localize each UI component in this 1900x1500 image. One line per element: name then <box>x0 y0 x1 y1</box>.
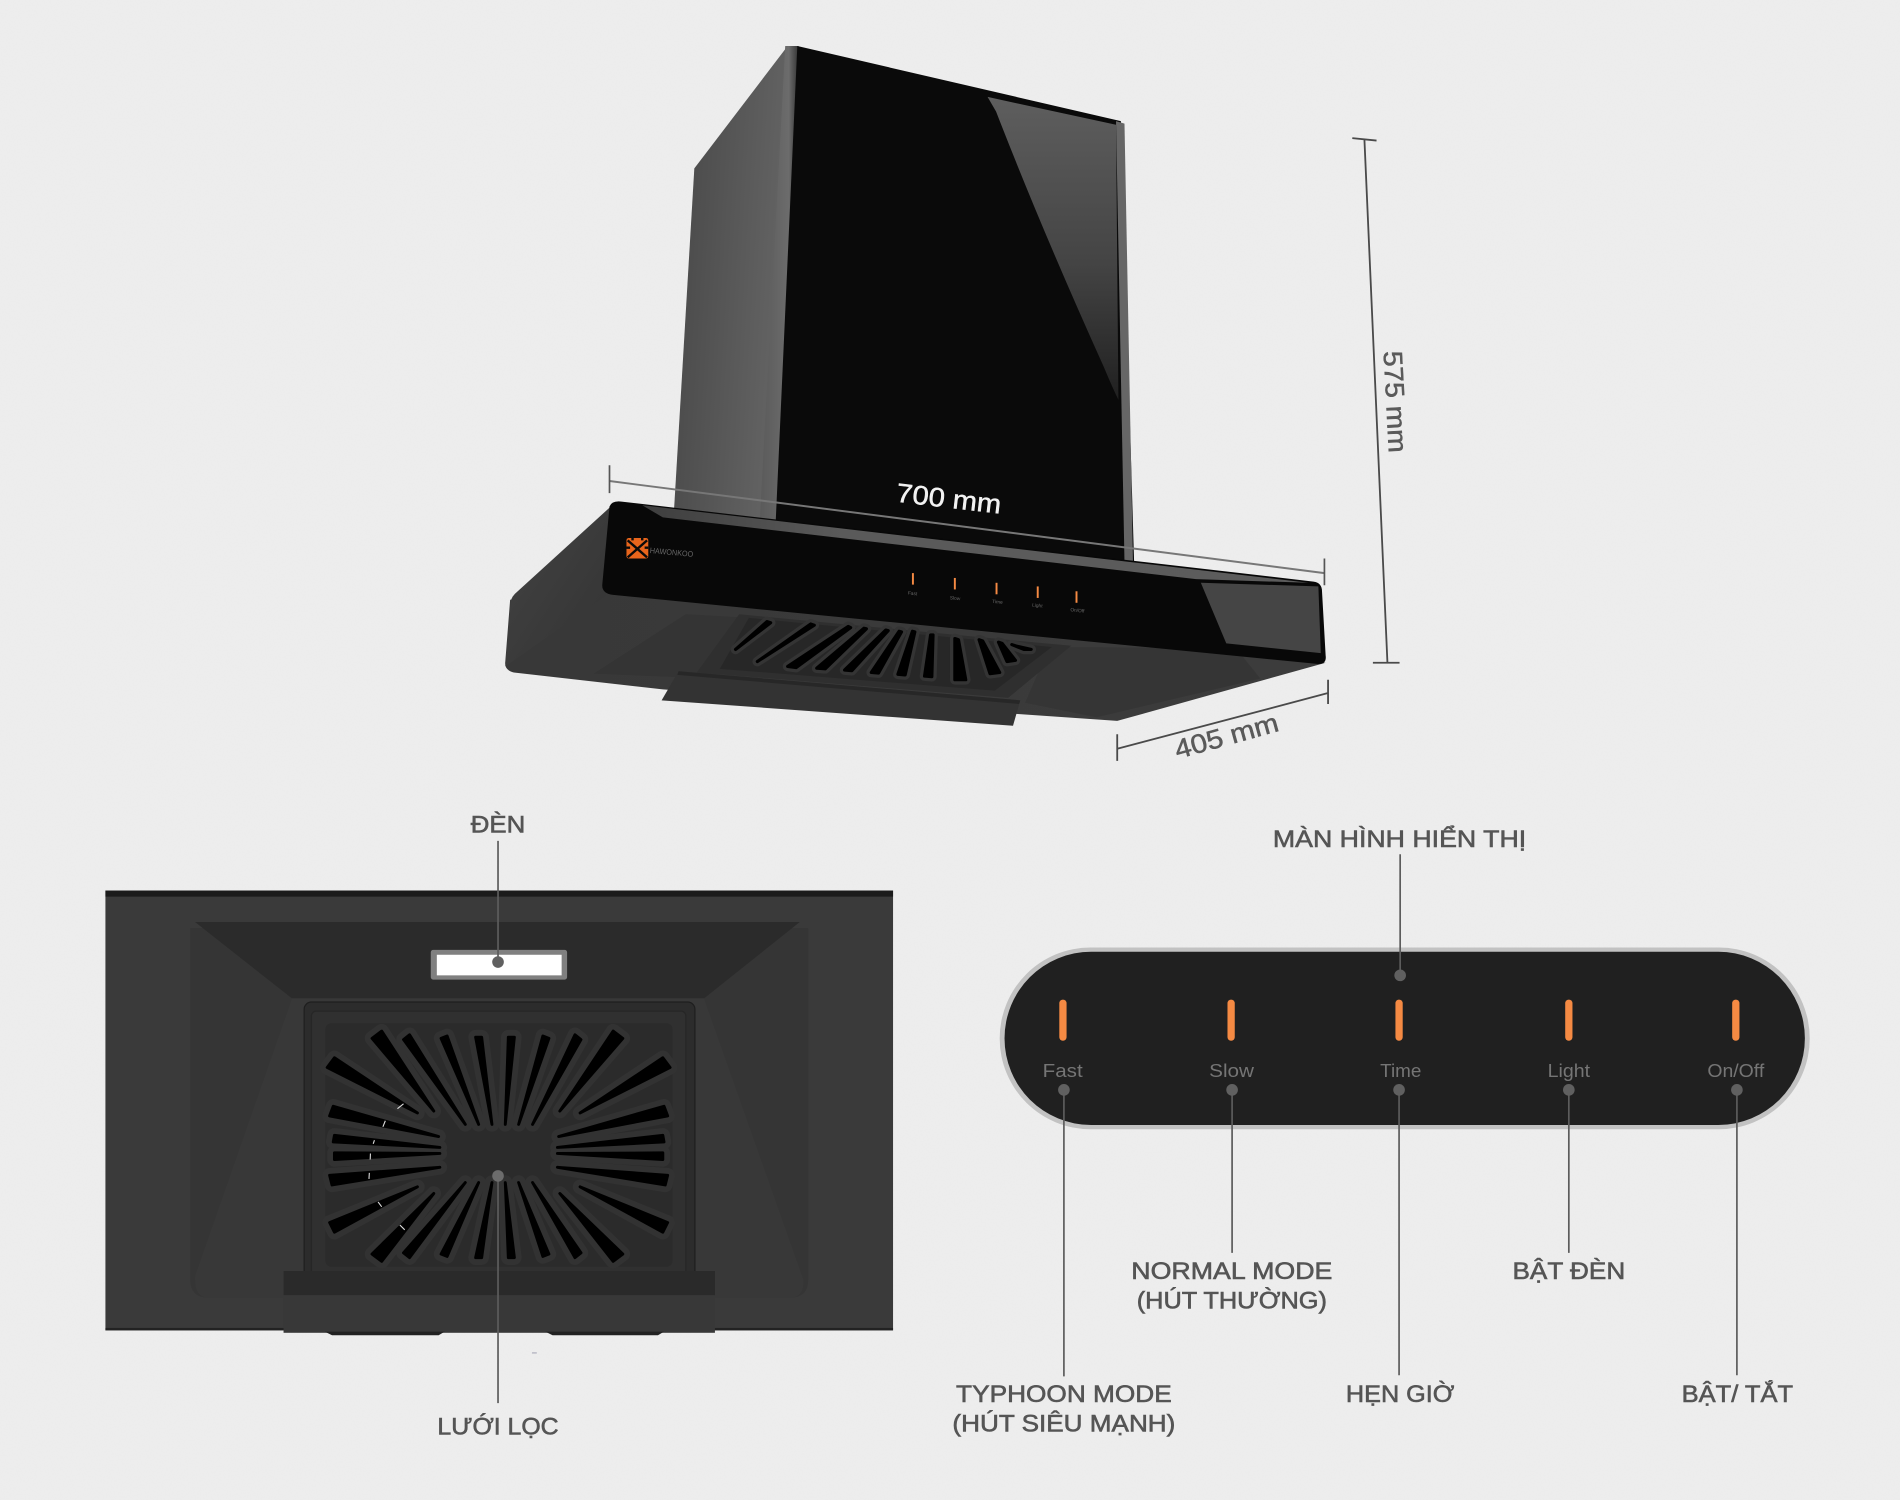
underside right shape <box>1025 647 1260 717</box>
panel buttons: Fast <box>908 590 918 597</box>
body bottom edge <box>105 1328 893 1330</box>
panel buttons: Light <box>1032 603 1044 610</box>
callout: lamp: ĐÈN <box>471 811 525 838</box>
filter inner frame <box>311 1011 686 1284</box>
callout: filter: LƯỚI LỌC <box>437 1414 559 1441</box>
hood left side <box>505 508 610 666</box>
chimney side panel <box>674 46 788 523</box>
brand logo <box>626 538 694 559</box>
callout: timer: HẸN GIỜ <box>1346 1381 1455 1408</box>
recessed area <box>190 928 808 1298</box>
glass reflection <box>988 97 1118 400</box>
filter slots <box>327 1031 670 1261</box>
filter glints <box>369 1104 405 1230</box>
inner trapezoid <box>195 998 803 1298</box>
chimney corner strip <box>760 46 799 523</box>
button labels: Fast <box>1043 1060 1084 1081</box>
oil tray handle <box>662 671 1020 726</box>
hood underside <box>505 588 1326 721</box>
callout: normal mode <box>1131 1084 1332 1315</box>
top wedge <box>195 922 800 998</box>
callout: light <box>1512 1084 1625 1285</box>
callout: typhoon mode: TYPHOON MODE <box>956 1381 1172 1408</box>
chimney front glass <box>776 46 1134 565</box>
panel buttons: On/Off <box>1070 607 1085 615</box>
small mark <box>532 1352 537 1354</box>
oil tray <box>284 1271 715 1333</box>
panel: underside view <box>105 891 893 1354</box>
dimension: height 575 mm: 575 mm <box>1378 350 1413 453</box>
button labels: Light <box>1548 1060 1591 1081</box>
grille frame <box>697 614 1071 698</box>
panel buttons: Slow <box>949 595 961 602</box>
brand logo: HAWONKOO <box>649 546 694 559</box>
tray feet <box>325 1332 664 1335</box>
callout: display: MÀN HÌNH HIỂN THỊ <box>1273 825 1526 853</box>
callout: power <box>1682 1084 1793 1408</box>
callout: normal mode: NORMAL MODE <box>1131 1258 1332 1285</box>
dimension: height 575 mm <box>1352 138 1413 663</box>
callout: typhoon mode: (HÚT SIÊU MẠNH) <box>952 1411 1175 1438</box>
grille slots <box>736 622 1031 680</box>
dimension: depth 405 mm <box>1117 680 1328 765</box>
panel buttons <box>908 573 1085 615</box>
pill face <box>1005 952 1805 1125</box>
callout: lamp <box>471 811 525 968</box>
callout: display <box>1273 825 1526 981</box>
chimney right edge <box>1116 121 1133 562</box>
underside body <box>105 891 893 1330</box>
callout: normal mode: (HÚT THƯỜNG) <box>1137 1288 1327 1315</box>
button labels: Time <box>1380 1060 1421 1081</box>
dimension: width 700 mm <box>610 465 1324 585</box>
filter frame <box>304 1002 695 1287</box>
panel buttons: Time <box>992 599 1003 606</box>
filter plate <box>325 1023 673 1267</box>
front control panel <box>602 501 1326 664</box>
callout: timer <box>1346 1084 1455 1408</box>
body top edge <box>105 891 893 897</box>
indicators <box>1059 1000 1739 1041</box>
grille plate <box>720 618 1052 691</box>
callout: power: BẬT/ TẮT <box>1682 1380 1793 1408</box>
pill border <box>1000 947 1810 1129</box>
lamp <box>431 950 567 980</box>
callout: filter <box>437 1170 559 1441</box>
button labels: Slow <box>1209 1060 1255 1081</box>
product: range hood perspective view <box>505 46 1326 726</box>
underside shadow shapes <box>594 614 751 679</box>
button labels <box>1043 1060 1765 1081</box>
dimension: depth 405 mm: 405 mm <box>1171 707 1282 765</box>
callout: typhoon mode <box>952 1084 1175 1438</box>
panel top bevel <box>642 505 1309 583</box>
dimension: width 700 mm: 700 mm <box>895 478 1003 520</box>
callout: light: BẬT ĐÈN <box>1512 1258 1625 1285</box>
button labels: On/Off <box>1707 1060 1765 1081</box>
panel: control panel close-up <box>1000 947 1810 1129</box>
panel reflection <box>1201 583 1321 653</box>
